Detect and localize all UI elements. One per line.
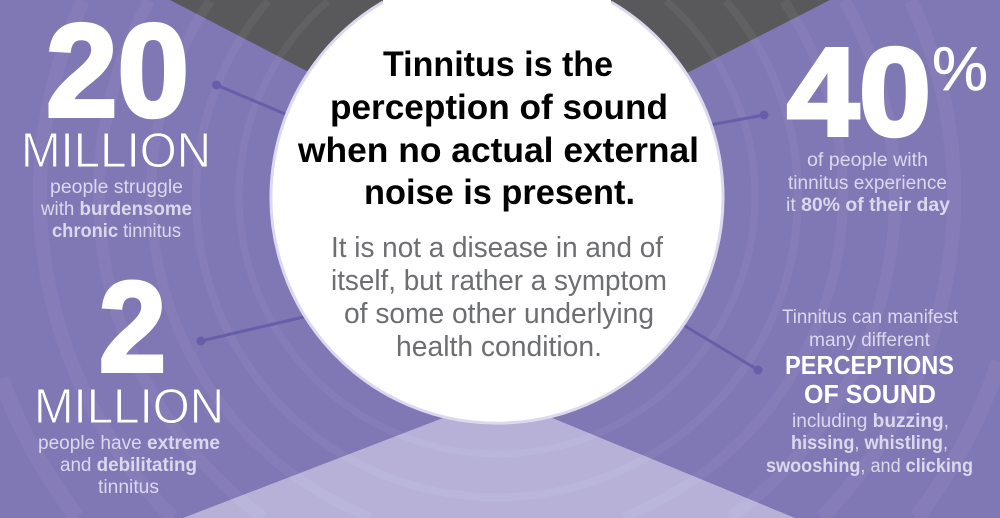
stat: 40 percent: tinnitus experience: [788, 173, 947, 194]
stat: perceptions of sound: many different: [809, 330, 931, 351]
stat: 2 million: and debilitating: [60, 455, 197, 476]
stat: 2 million: 2: [99, 256, 166, 399]
stat: 40 percent: %: [932, 35, 988, 104]
stat: 2 million: people have extreme: [38, 433, 220, 454]
central headline: [297, 45, 699, 212]
stat: perceptions of sound: [766, 307, 973, 477]
stat: 20 million: [21, 0, 211, 242]
stat: 40 percent: of people with: [807, 150, 928, 171]
central explanation: itself, but rather a symptom: [331, 265, 667, 297]
top of central circle: [383, 0, 611, 4]
stat: perceptions of sound: Tinnitus can manifest: [782, 307, 959, 328]
central explanation: of some other underlying: [344, 298, 654, 330]
stat: 20 million: people struggle: [50, 177, 183, 198]
central explanation: health condition.: [396, 331, 602, 363]
central explanation: It is not a disease in and of: [331, 232, 664, 264]
connector: perceptions of sound: [680, 323, 762, 374]
stat: 40 percent: 40: [787, 23, 931, 162]
central headline: when no actual external: [297, 131, 699, 170]
stat: 20 million: chronic tinnitus: [52, 221, 181, 242]
stat: perceptions of sound: hissing, whistling,: [791, 433, 948, 454]
connector: 20 million: [212, 80, 290, 116]
connector: 40 percent: [710, 110, 768, 125]
central headline: perception of sound: [330, 88, 668, 127]
stat: perceptions of sound: including buzzing,: [792, 411, 949, 432]
stat: 40 percent: it 80% of their day: [786, 195, 950, 216]
stat: perceptions of sound: OF SOUND: [804, 379, 936, 409]
bottom light wedge: [183, 417, 795, 518]
stat: perceptions of sound: swooshing, and clicking: [766, 456, 973, 477]
stat: 20 million: MILLION: [21, 124, 211, 178]
central headline: noise is present.: [364, 173, 635, 212]
stat: 2 million: MILLION: [34, 380, 224, 434]
central circle: [271, 2, 723, 423]
stat: 40 percent: [786, 23, 988, 216]
stat: 2 million: tinnitus: [98, 477, 159, 498]
stat: 20 million: 20: [46, 0, 189, 144]
connector: 2 million: [196, 315, 312, 346]
stat: perceptions of sound: PERCEPTIONS: [785, 350, 954, 380]
stat: 2 million: [34, 256, 224, 498]
central headline: Tinnitus is the: [383, 45, 613, 84]
stat: 20 million: with burdensome: [40, 199, 192, 220]
top dark wedge: [170, 0, 830, 170]
central explanation: [331, 232, 667, 363]
